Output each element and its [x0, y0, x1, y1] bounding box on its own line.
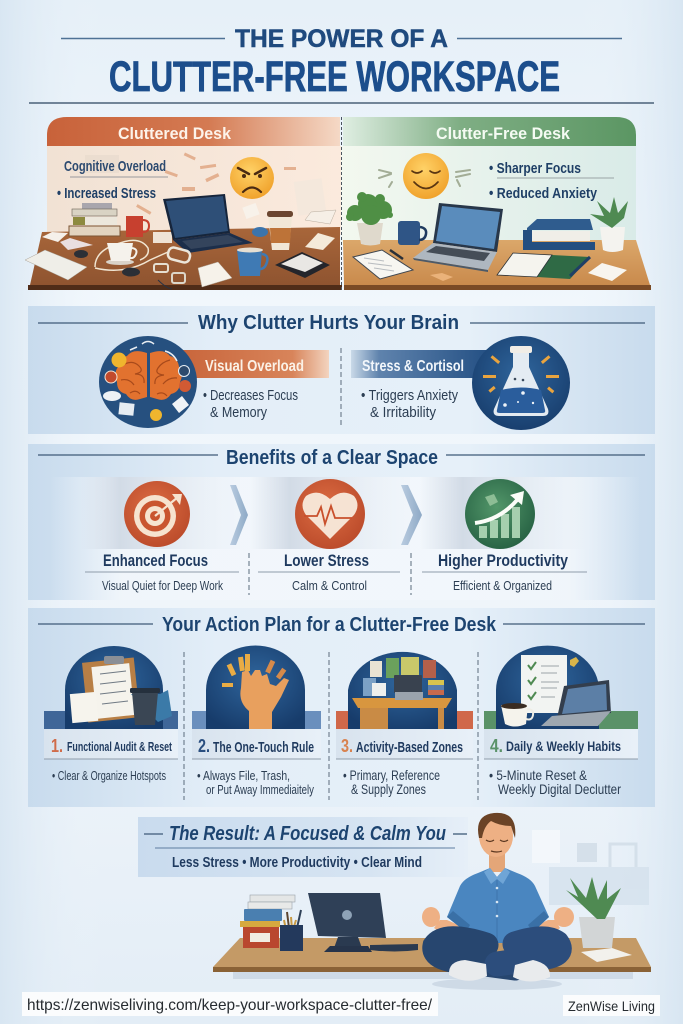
- shoes: [449, 960, 487, 981]
- background frames: [532, 830, 649, 905]
- header: clutter-free desk: [343, 117, 636, 146]
- text: visual overload: & Memory: [210, 404, 267, 421]
- header: clutter-free desk: Clutter-Free Desk: [436, 124, 571, 143]
- benefit: enhanced focus: [85, 551, 239, 593]
- source url: https://zenwiseliving.com/keep-your-workspace-clutter-free/: [27, 997, 433, 1014]
- text: visual overload: • Decreases Focus: [203, 387, 298, 404]
- icon: checklist, coffee and laptop: [496, 646, 611, 729]
- step heading: 1.: [51, 736, 63, 756]
- text: cluttered effects: • Increased Stress: [57, 185, 156, 202]
- step text: or Put Away Immediaitely: [206, 782, 314, 797]
- icon: clipboard and bin: [65, 646, 172, 729]
- books: [69, 203, 120, 236]
- source url: [22, 992, 438, 1016]
- cables: [95, 240, 191, 283]
- step heading: Activity-Based Zones: [356, 739, 463, 756]
- step text: Weekly Digital Declutter: [498, 781, 621, 797]
- cluttered desk illustration: [25, 194, 342, 290]
- clutter-free desk illustration: [343, 192, 651, 290]
- icon: target: [124, 481, 190, 547]
- step text: • Primary, Reference: [343, 767, 440, 783]
- book stack: [523, 219, 595, 250]
- blue roll: [252, 227, 268, 237]
- text: visual overload: [203, 387, 298, 421]
- small white box: [153, 232, 172, 243]
- calm emoji: [379, 153, 470, 199]
- step heading: 3.: [341, 736, 353, 756]
- notebook: [497, 253, 590, 279]
- band: stress and cortisol: Stress & Cortisol: [362, 358, 464, 375]
- step text: • Always File, Trash,: [197, 768, 290, 783]
- forearms and hands: [422, 907, 574, 938]
- papers: [25, 232, 335, 287]
- icon: desk zones: [348, 652, 457, 729]
- band: stress and cortisol: [351, 350, 491, 378]
- step heading: [51, 736, 172, 756]
- cluttered side background: [47, 146, 341, 235]
- flying clutter scraps: [136, 153, 296, 215]
- benefit: lower stress: [258, 551, 400, 593]
- step 4: [484, 646, 638, 797]
- brand label: ZenWise Living: [568, 999, 655, 1014]
- step 3: [336, 652, 473, 797]
- step heading: [341, 736, 463, 756]
- result subtitle: Less Stress • More Productivity • Clear Mind: [172, 855, 422, 871]
- header: cluttered desk: [47, 117, 340, 146]
- pen cup: [280, 910, 303, 951]
- step heading: [490, 736, 621, 756]
- legs: [435, 939, 515, 968]
- heading: Benefits of a Clear Space: [226, 447, 438, 469]
- right plant: [590, 197, 628, 252]
- step text: • Clear & Organize Hotspots: [52, 768, 166, 783]
- text: stress and cortisol: • Triggers Anxiety: [361, 387, 458, 404]
- step heading: The One-Touch Rule: [213, 739, 314, 756]
- arrow: chevron two: [401, 485, 422, 545]
- panel: the result: [138, 817, 468, 877]
- takeaway cup: [267, 211, 293, 250]
- benefit: enhanced focus: Visual Quiet for Deep Work: [102, 578, 223, 593]
- step text: [489, 767, 621, 797]
- step heading: [198, 736, 314, 756]
- white mug: [106, 243, 136, 265]
- step text: • 5-Minute Reset &: [489, 767, 588, 783]
- step heading: Functional Audit & Reset: [67, 739, 172, 754]
- benefit: lower stress: Lower Stress: [284, 551, 369, 570]
- step 1: [44, 646, 178, 783]
- person: [422, 813, 574, 982]
- text: stress and cortisol: [361, 387, 458, 421]
- note: [588, 263, 627, 281]
- black device: [275, 252, 330, 278]
- step text: [343, 767, 440, 797]
- laptop: [413, 203, 503, 272]
- desk: [213, 938, 651, 990]
- benefit: higher productivity: Efficient & Organized: [453, 578, 552, 593]
- panel: action plan: [28, 608, 655, 807]
- text: cluttered effects: [57, 158, 168, 202]
- books and box: [240, 895, 295, 948]
- monitor: [308, 893, 418, 952]
- text: clutter-free effects: • Sharper Focus: [489, 160, 581, 177]
- blue mug: [237, 248, 267, 276]
- panel: benefits: [28, 444, 655, 600]
- clipboard: [353, 250, 413, 279]
- benefit: lower stress: Calm & Control: [292, 578, 367, 593]
- step text: [197, 768, 314, 797]
- benefit: higher productivity: [422, 551, 587, 593]
- sticky note: [430, 273, 453, 281]
- blue mug: [398, 221, 426, 245]
- icon: hand: [206, 646, 305, 729]
- text: stress and cortisol: & Irritability: [370, 404, 436, 421]
- step heading: 2.: [198, 736, 210, 756]
- heading: Your Action Plan for a Clutter-Free Desk: [162, 614, 497, 636]
- step text: & Supply Zones: [351, 781, 426, 797]
- band: visual overload: Visual Overload: [205, 358, 304, 375]
- icon: heart: [295, 479, 365, 549]
- step heading: Daily & Weekly Habits: [506, 738, 621, 754]
- text: clutter-free effects: • Reduced Anxiety: [489, 185, 598, 202]
- clutter-free side background: [341, 146, 636, 245]
- plant: [566, 877, 632, 962]
- title line one: THE POWER OF A: [235, 25, 448, 53]
- heading: Why Clutter Hurts Your Brain: [198, 312, 459, 334]
- text: clutter-free effects: [489, 160, 614, 202]
- angry emoji: [230, 157, 274, 199]
- icon: flask: [472, 336, 570, 430]
- head: [479, 815, 513, 857]
- panel: why clutter hurts: [28, 306, 655, 434]
- laptop: [163, 194, 253, 253]
- result heading: The Result: A Focused & Calm You: [169, 823, 446, 845]
- panel: desk comparison: [25, 117, 651, 290]
- brand label: [563, 995, 660, 1016]
- band: visual overload: [183, 350, 329, 378]
- step heading: 4.: [490, 736, 503, 756]
- benefit: enhanced focus: Enhanced Focus: [103, 551, 208, 570]
- title: [29, 25, 654, 103]
- header: cluttered desk: Cluttered Desk: [118, 124, 232, 143]
- benefit: higher productivity: Higher Productivity: [438, 551, 568, 570]
- meditation desk scene: [213, 813, 651, 990]
- icon: growth chart: [465, 479, 535, 549]
- neck: [489, 850, 505, 872]
- text: cluttered effects: Cognitive Overload: [64, 158, 166, 175]
- red mug: [126, 216, 149, 237]
- shirt: [447, 868, 549, 943]
- arrow: chevron one: [230, 485, 248, 545]
- left plant: [346, 192, 393, 246]
- icon: brain: [99, 336, 197, 428]
- step 2: [192, 646, 321, 797]
